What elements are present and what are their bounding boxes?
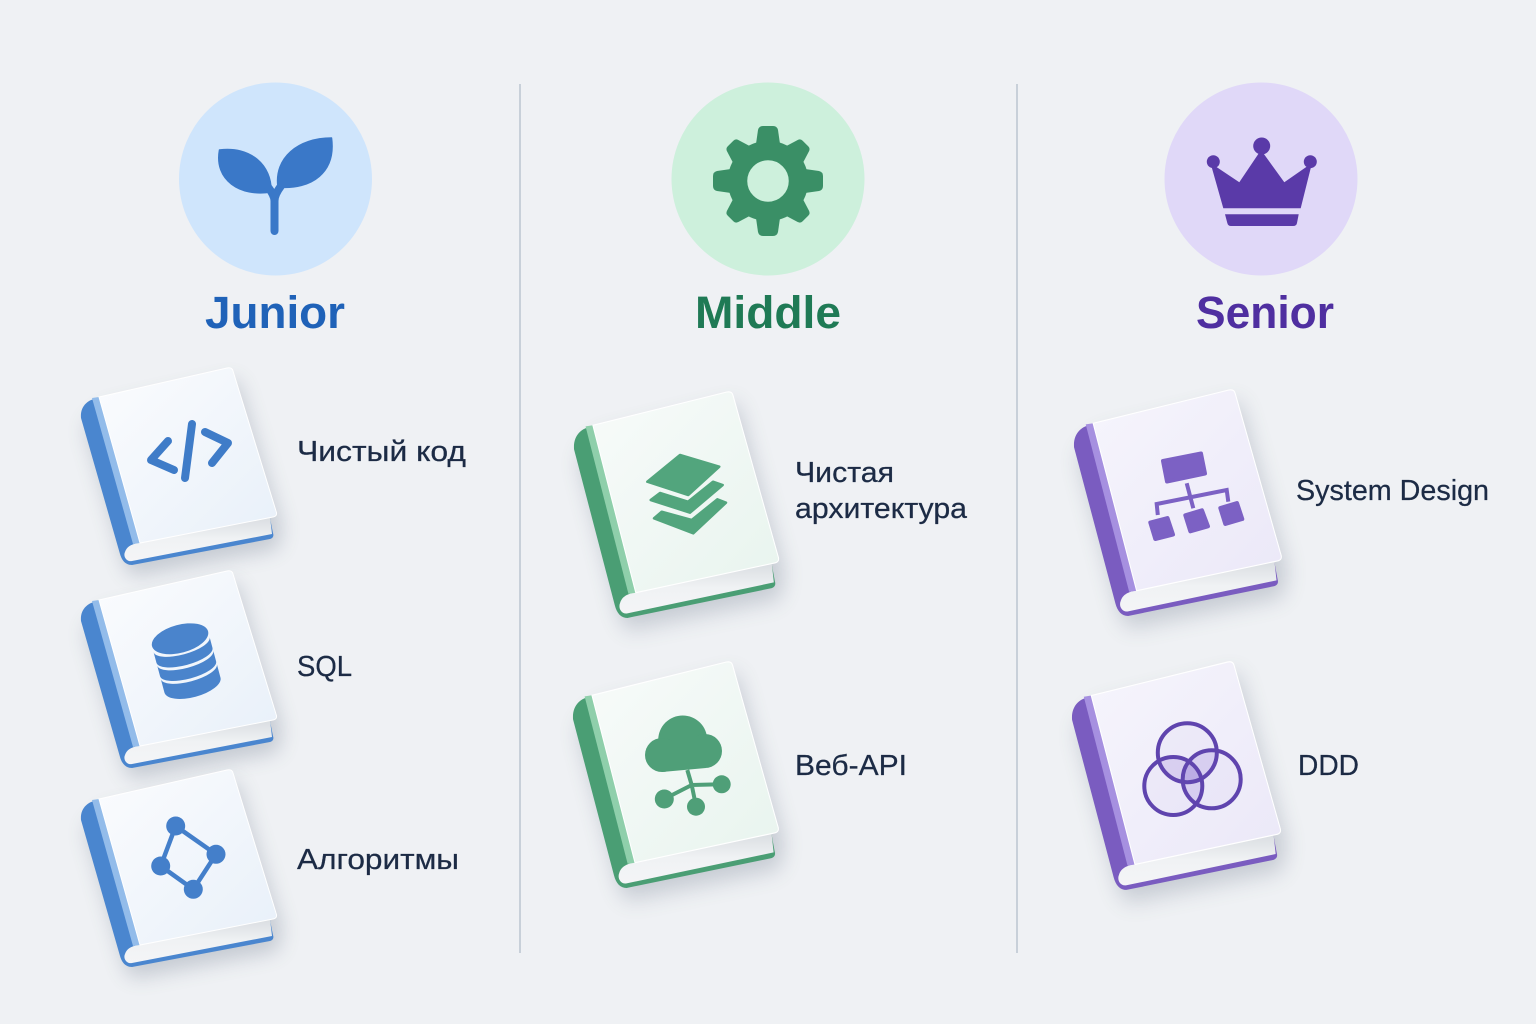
book: System Design [1074, 390, 1287, 627]
icon: layers [647, 455, 726, 533]
book: Чистый код [81, 368, 282, 576]
book: SQL [81, 571, 282, 779]
label: Чистая архитектура: Чистая [795, 457, 894, 489]
label: System Design: System Design [1296, 475, 1489, 507]
label: Веб-API: Веб-API [795, 750, 907, 782]
icon: gear badge [672, 82, 864, 276]
book: Алгоритмы [81, 770, 282, 978]
icon: venn diagram [1144, 723, 1241, 815]
icon: graph [151, 816, 226, 899]
label: Чистый код: Чистый код [297, 436, 466, 468]
icon: hierarchy [1150, 454, 1242, 539]
panel: Middle [573, 82, 968, 899]
panel: Senior [1072, 82, 1489, 901]
icon: crown badge [1164, 82, 1358, 276]
label: Чистая архитектура [795, 457, 968, 525]
icon: code brackets [151, 424, 228, 478]
book: Чистая архитектура [574, 392, 784, 629]
label: Алгоритмы: Алгоритмы [297, 844, 459, 876]
icon: database [148, 618, 224, 704]
label: Чистая архитектура: архитектура [795, 493, 968, 525]
heading: Senior: Senior [1196, 287, 1334, 338]
label: DDD: DDD [1298, 750, 1359, 782]
heading: Middle: Middle [695, 287, 841, 338]
heading: Junior: Junior [205, 287, 345, 338]
icon: sprout badge [179, 82, 372, 276]
label: SQL: SQL [297, 651, 352, 683]
icon: cloud network [645, 716, 731, 816]
panel: Junior [81, 82, 466, 978]
book: DDD [1072, 662, 1286, 901]
book: Веб-API [573, 662, 784, 899]
